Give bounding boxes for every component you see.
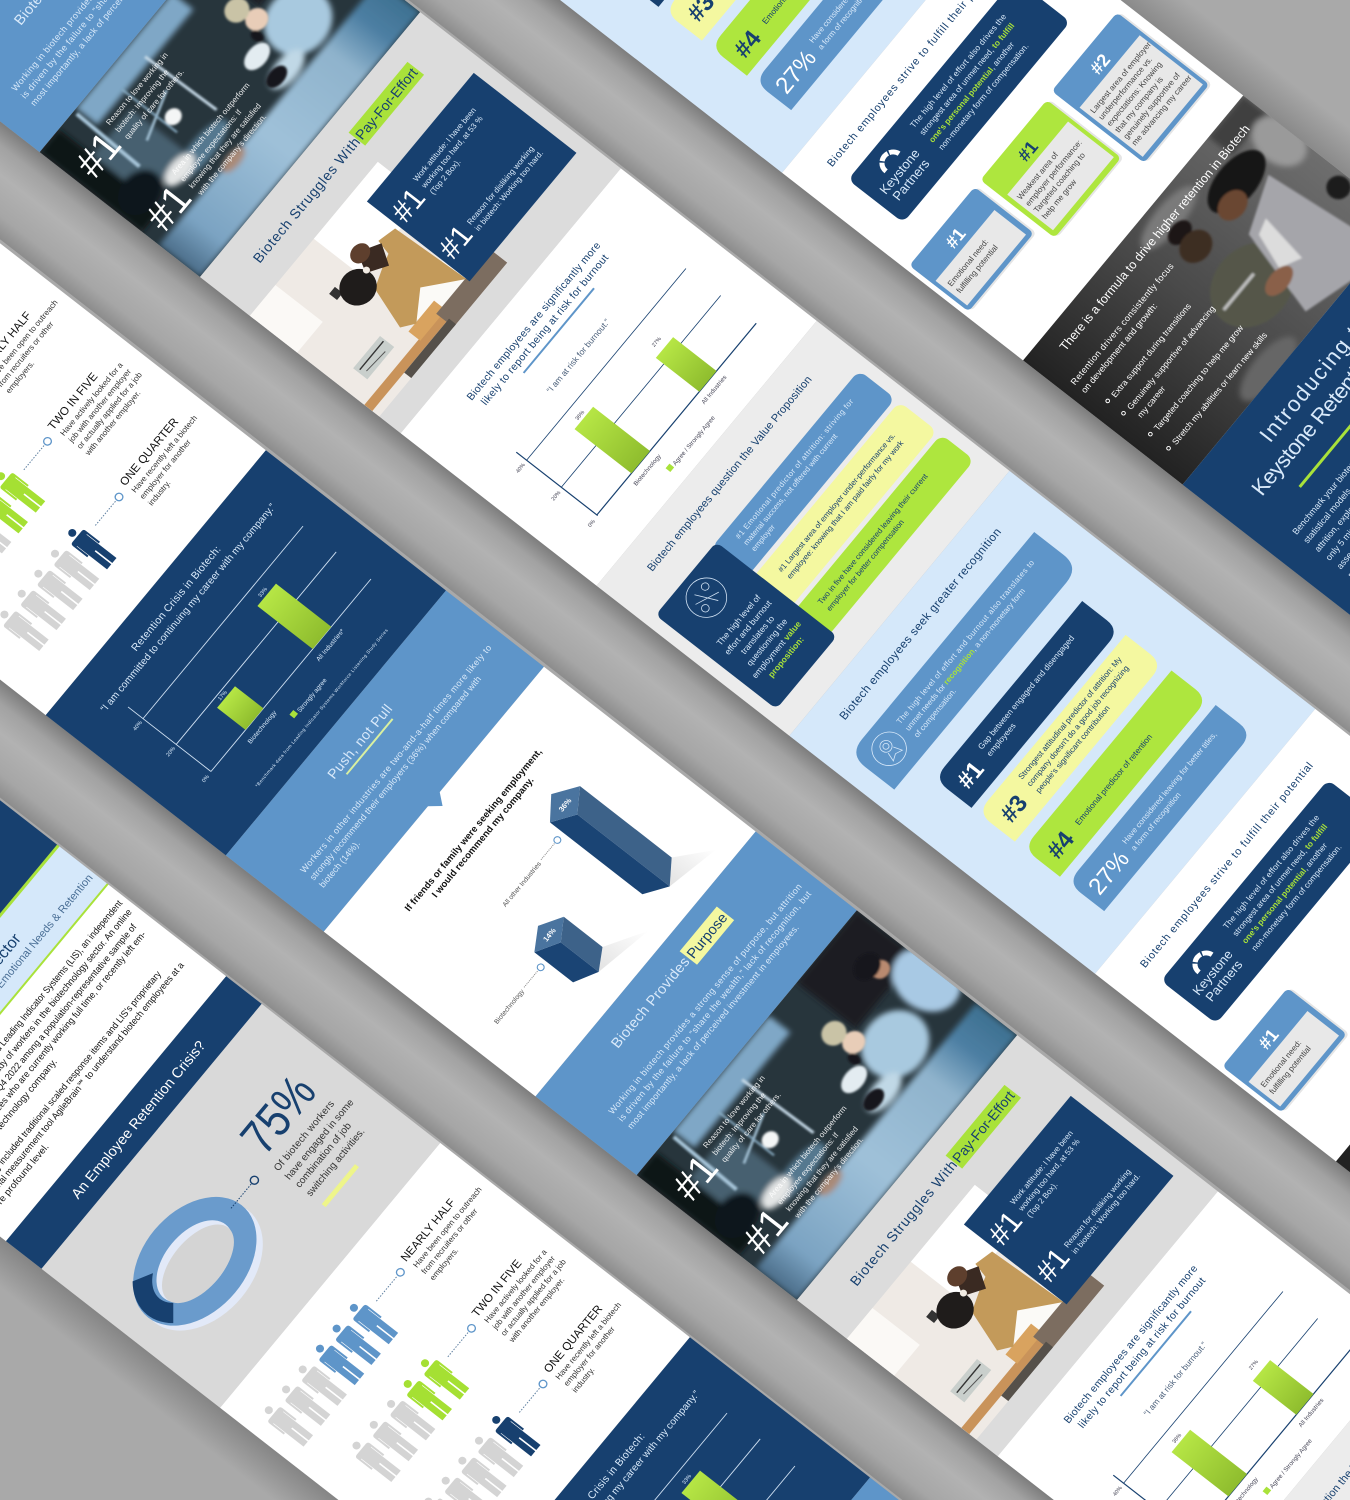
- callout: one quarter: [511, 1292, 640, 1433]
- callout: two in five: Have actively looked for a: [58, 360, 125, 438]
- panel: burnout chart: 20%: [551, 490, 562, 502]
- panel: job switching people: [0, 217, 266, 715]
- panel: study description: [0, 885, 226, 1241]
- card: #2 largest area: expectations: Knowing: [1105, 60, 1164, 128]
- panel: lab photo with stats: [637, 896, 1029, 1300]
- card: #1 emotional need: fulfilling potential: [955, 243, 1000, 295]
- panel: retention crisis chart: Strongly agree: [296, 677, 329, 714]
- panel: burnout chart: likely to report being at risk for burnout: [1076, 1275, 1208, 1431]
- panel: push not pull edge: [650, 1477, 968, 1500]
- pill: #1 gap: Gap between engaged and disengaged: [976, 633, 1077, 751]
- panel: burnout chart: All Industries: [700, 374, 728, 406]
- panel: pay-for-effort: Pay-For-Effort: [352, 65, 421, 143]
- icons: row two: [0, 466, 47, 597]
- callout: one quarter: ONE QUARTER: [542, 1303, 605, 1375]
- callout: one quarter: ONE QUARTER: [118, 416, 181, 488]
- callout: navy stats box: [964, 1096, 1173, 1304]
- callout: two in five: with another employer.: [83, 389, 143, 458]
- pill: 27 percent: [755, 0, 939, 110]
- heading: An Employee Retention Crisis?: An Employee Retention Crisis?: [69, 1038, 209, 1202]
- panel: push not pull: Push, not Pull: [324, 701, 395, 782]
- card: #1 emotional need: Emotional need:: [1259, 1039, 1303, 1089]
- card: keystone statement: strongest area of unmet need, to fulfill: [917, 21, 1016, 137]
- panel: lab photo with stats: Area in which biotech outperform: [170, 81, 252, 177]
- callout: nearly half: NEARLY HALF: [399, 1197, 458, 1264]
- panel: lab photo with stats: knowing that they are satisfied: [187, 102, 263, 190]
- panel: recognition: [789, 471, 1315, 974]
- callout: one quarter: [87, 405, 216, 546]
- panel: push not pull: [226, 590, 544, 932]
- card: keystone statement: non-monetary form of compensation.: [1249, 842, 1344, 953]
- panel: pay-for-effort: [797, 1035, 1218, 1456]
- callout: navy stats box: Work attitude: I have been: [1008, 1129, 1075, 1206]
- card: value proposition: translates to: [738, 614, 776, 656]
- card: #1 weakest area: [980, 98, 1124, 239]
- callout: one quarter: industry.: [570, 1366, 597, 1394]
- bar: all other industries 36%: [537, 750, 716, 912]
- callout: two in five: TWO IN FIVE: [470, 1258, 525, 1319]
- panel: retention crisis chart: All Industries*: [315, 628, 346, 663]
- callout: navy stats box: Reason for disliking working: [1062, 1167, 1133, 1249]
- icons: row two: [347, 1353, 471, 1484]
- panel: lab photo with stats: Reason to love working in: [104, 51, 170, 127]
- callout: nearly half: [368, 1177, 500, 1321]
- card: value proposition: questioning the: [744, 617, 790, 668]
- panel: formula photo: [1023, 89, 1350, 490]
- pill: 27 percent: [1068, 705, 1252, 911]
- panel: push not pull: strongly recommend their employers (36%) when compared with: [308, 674, 483, 882]
- callout: navy stats box: working too hard, at 53 %: [419, 114, 485, 190]
- panel: lab photo with stats: Reason to love working in: [701, 1074, 767, 1150]
- text: stat description: switching activities.: [304, 1127, 368, 1199]
- card: keystone statement: one's personal potential, another: [1240, 841, 1329, 945]
- card: #1 emotional need: [909, 185, 1037, 313]
- panel: burnout chart: Biotech employees are significantly more: [465, 240, 603, 403]
- pill: recognition statement: [849, 532, 1079, 790]
- bar: biotechnology 14%: [523, 877, 648, 998]
- pill: #1 gap: [934, 601, 1119, 808]
- panel: retention crisis chart: 17%: [217, 690, 229, 702]
- list: retention drivers: [1103, 283, 1269, 453]
- label: all other industries: [500, 835, 563, 908]
- card: #2 largest area: Largest area of employer: [1088, 40, 1153, 115]
- panel: lab photo with stats: #1: [137, 177, 200, 239]
- panel: recommendation 3D chart: I would recommend my company.: [430, 775, 537, 900]
- bar: biotechnology 14%: 14%: [541, 926, 558, 943]
- callout: one quarter: employer for another: [562, 1325, 617, 1388]
- pill: #1 gap: #1: [952, 757, 990, 794]
- panel: burnout chart: likely to report being at risk for burnout: [479, 252, 611, 408]
- callout: nearly half: employers.: [428, 1246, 460, 1282]
- icon: percent coins: [678, 570, 735, 625]
- icons: row three: [419, 1410, 542, 1500]
- panel: burnout chart: 40%: [515, 462, 527, 475]
- list: retention drivers: Genuinely supportive of advancing: [1125, 304, 1217, 412]
- panel: burnout chart: 27%: [651, 336, 663, 348]
- panel: formula photo edge: [1336, 896, 1350, 1198]
- panel: burnout chart: Biotechnology: [632, 452, 663, 487]
- card: value proposition: employment value: [750, 619, 803, 680]
- panel: retention crisis chart: *Benchmark data from Leading Indicator Systems Workforce Listening Study Series: [254, 627, 389, 788]
- callout: navy stats box: working too hard, at 53 %: [1016, 1137, 1082, 1213]
- panel: burnout chart: 36%: [1171, 1433, 1183, 1445]
- card: #1 weakest area: help me grow: [1040, 178, 1078, 221]
- panel: value proposition: #1 Emotional predictor of attrition: striving for: [734, 397, 856, 541]
- card: #1 weakest area: employer performance:: [1024, 138, 1084, 208]
- text: stat description: [272, 1089, 378, 1199]
- panel: retention crisis chart: 33%: [257, 587, 269, 599]
- pill: #3 predictor: [978, 635, 1163, 842]
- callout: navy stats box: #1: [432, 219, 480, 265]
- panel: retention crisis chart: “I am committed to continuing my career with my company.”: [99, 502, 278, 714]
- panel: formula photo: There is a formula to drive higher retention in Biotech: [1057, 122, 1253, 353]
- pill: 27 percent: 27%: [1083, 846, 1135, 900]
- pill: #1 gap: [621, 0, 806, 7]
- card: #2 largest area: genuinely supportive of: [1122, 71, 1182, 141]
- panel: biotech provides purpose: [0, 0, 260, 152]
- panel: crisis stat: [42, 1004, 440, 1408]
- panel: burnout chart: 36%: [574, 410, 586, 422]
- connector: [228, 1175, 260, 1211]
- panel: retention crisis chart: Retention Crisis in Biotech:: [129, 544, 224, 654]
- panel: formula photo: on development and growth:: [1079, 301, 1159, 395]
- callout: navy stats box: (Top 2 Box).: [1025, 1180, 1060, 1219]
- panel: biotech provides purpose: Working in biotech provides a strong sense of purpose, but attrition: [606, 882, 804, 1116]
- callout: one quarter: employer for another: [138, 438, 193, 501]
- pill: #1 gap: employees: [984, 721, 1018, 758]
- callout: two in five: or actually applied for a job: [499, 1257, 568, 1338]
- pill: recognition statement: of compensation.: [912, 687, 958, 739]
- callout: navy stats box: (Top 2 Box).: [428, 157, 463, 196]
- callout: navy stats box: #1: [385, 182, 432, 228]
- panel: burnout chart: Agree / Strongly Agree: [1269, 1437, 1314, 1490]
- panel: value proposition: [1194, 1344, 1350, 1500]
- panel: burnout chart: All Industries: [1297, 1397, 1325, 1429]
- pill: #4 retention: Emotional predictor of retention: [1073, 732, 1155, 827]
- text: stat description: have engaged in some: [283, 1097, 357, 1182]
- card: value proposition: The high level of: [714, 592, 763, 647]
- callout: two in five: or actually applied for a job: [75, 370, 144, 451]
- panel: lab photo with stats: employee expectations: If: [775, 1130, 841, 1206]
- label: biotechnology: [492, 963, 547, 1026]
- card: #1 emotional need: #1: [941, 224, 970, 252]
- card: #1 weakest area: Targeted coaching to: [1032, 151, 1087, 214]
- panel: burnout chart: Biotech employees are significantly more: [1062, 1263, 1200, 1426]
- callout: two in five: TWO IN FIVE: [46, 371, 101, 432]
- panel: pay-for-effort: Biotech Struggles With: [249, 134, 363, 266]
- panel: recognition: [519, 0, 1002, 173]
- panel: navy header block: [0, 631, 59, 1111]
- callout: two in five: with another employer.: [507, 1276, 567, 1345]
- callout: one quarter: Have recently left a biotech: [554, 1301, 623, 1381]
- card: value proposition: [655, 542, 837, 709]
- logo: Keystone Partners: Partners: [889, 156, 933, 203]
- heading: An Employee Retention Crisis?: [6, 976, 268, 1274]
- panel: lab photo with stats: [40, 0, 432, 277]
- card: #1 weakest area: Weakest area of: [1015, 150, 1060, 201]
- callout: two in five: job with another employer: [66, 367, 133, 445]
- callout: navy stats box: in biotech: Working too hard.: [1070, 1172, 1142, 1256]
- callout: two in five: Have actively looked for a: [482, 1247, 549, 1325]
- list: retention drivers: my career: [1135, 384, 1168, 420]
- panel: lab photo with stats: #1: [67, 124, 130, 185]
- card: keystone statement: non-monetary form of compensation.: [936, 41, 1031, 152]
- pill: #3 predictor: people's significant contribution: [1034, 704, 1112, 795]
- text: stat description: Of biotech workers: [272, 1099, 337, 1174]
- panel: retention crisis chart: 20%: [165, 746, 177, 758]
- strip: report page, bottom-left run: [0, 508, 1350, 1500]
- card: #1 emotional need: #1: [1254, 1025, 1283, 1053]
- panel: retention crisis chart: 0%: [201, 774, 211, 784]
- panel: push not pull: biotech (14%).: [317, 839, 362, 889]
- callout: nearly half: employers.: [4, 359, 36, 395]
- card: keystone statement: The high level of effort also drives the: [908, 12, 1009, 130]
- panel: burnout chart: 27%: [1248, 1359, 1260, 1371]
- panel: biotech provides purpose: Purpose: [684, 911, 731, 962]
- panel: lab photo with stats: quality of care for others.: [122, 68, 186, 141]
- logo: Keystone Partners: [1178, 939, 1247, 1007]
- callout: navy stats box: Reason for disliking working: [465, 144, 536, 226]
- bar: all other industries 36%: 36%: [557, 796, 574, 813]
- photo: stressed worker: [250, 162, 507, 417]
- panel: lab photo with stats: with the company's direction.: [792, 1135, 865, 1221]
- callout: nearly half: [0, 290, 76, 397]
- pill: #4 retention: #4: [1042, 826, 1080, 864]
- callout: one quarter: industry.: [146, 479, 173, 507]
- panel: retention crisis chart: [46, 450, 446, 855]
- logo: Keystone Partners: Keystone: [876, 146, 923, 197]
- pill: 27 percent: 27%: [770, 45, 822, 99]
- panel: biotech provides purpose: is driven by the failure to “share the wealth,” lack of recognition, but: [616, 889, 814, 1123]
- callout: nearly half: Have been open to outreach: [411, 1185, 484, 1269]
- panel: biotech provides purpose: Biotech Provides: [608, 955, 693, 1051]
- strip: report page, top-right run: [380, 0, 1350, 778]
- stat: 75%: 75%: [231, 1066, 327, 1164]
- panel: value proposition: employer: [749, 522, 777, 553]
- panel: pay-for-effort: [200, 12, 621, 433]
- icons: row three: [0, 523, 118, 653]
- panel: lab photo with stats: quality of care for others.: [719, 1091, 783, 1164]
- callout: navy stats box: Work attitude: I have been: [411, 106, 478, 183]
- panel: biotech provides purpose: most importantly, a lack of perceived investment in employees.: [625, 923, 801, 1131]
- donut chart: 75 percent: [108, 1174, 288, 1354]
- callout: navy stats box: #1: [982, 1205, 1029, 1251]
- panel: lab photo with stats: biotech: Improving the: [113, 67, 171, 134]
- logo: Keystone Partners: [865, 138, 934, 206]
- panel: lab photo with stats: Area in which biotech outperform: [767, 1104, 849, 1200]
- pill: 27 percent: a form of recognition: [1129, 791, 1183, 852]
- logo: Keystone Partners: Keystone: [1189, 947, 1236, 998]
- panel: lab photo with stats: #1: [664, 1147, 727, 1208]
- card: keystone statement: one's personal potential, another: [927, 40, 1016, 144]
- panel: lab photo with stats: biotech: Improving the: [710, 1090, 768, 1157]
- panel: formula photo: Retention drivers consistently focus: [1069, 261, 1176, 387]
- pill: #4 retention: [711, 0, 895, 76]
- pill: 27 percent: Have considered leaving for better titles,: [1120, 730, 1219, 846]
- panel: lab photo with stats: employee expectations: If: [178, 107, 244, 183]
- card: #2 largest area: [1052, 11, 1212, 164]
- panel: burnout chart: Agree / Strongly Agree: [672, 414, 717, 467]
- panel: burnout chart: [998, 1191, 1350, 1500]
- photo: stressed worker: [847, 1185, 1104, 1440]
- panel: recognition: Biotech employees seek greater recognition: [837, 526, 1004, 723]
- panel: lab photo with stats: with the company's direction.: [195, 112, 268, 198]
- icons: row one: [259, 1298, 400, 1449]
- text: stat description: combination of job: [293, 1121, 354, 1190]
- callout: nearly half: from recruiters or other: [420, 1207, 480, 1276]
- callout: navy stats box: #1: [1029, 1242, 1077, 1288]
- card: #2 largest area: that my company is: [1113, 75, 1165, 134]
- accent underline: [322, 1164, 359, 1207]
- pill: #3 predictor: company doesn't do a good job recognizing: [1025, 664, 1131, 788]
- card: keystone statement: [848, 0, 1070, 223]
- card: #1 emotional need: fulfilling potential: [1268, 1044, 1313, 1096]
- panel: value proposition: [597, 321, 1010, 736]
- panel: value proposition: employee: knowing that I am paid fairly for my work: [785, 439, 905, 581]
- panel: burnout chart: “I am at risk for burnout.”: [1142, 1340, 1209, 1418]
- callout: two in five: [15, 349, 153, 496]
- pill: #4 retention: #4: [729, 25, 767, 63]
- panel: lab photo with stats: knowing that they are satisfied: [784, 1125, 860, 1213]
- panel: value proposition: Biotech employees question the Value Proposition: [645, 374, 815, 574]
- pill: #4 retention: [1024, 671, 1208, 877]
- panel: value proposition: employer for better compensation: [825, 518, 906, 613]
- callout: two in five: job with another employer: [490, 1254, 557, 1332]
- panel: push not pull: Workers in other industries are two-and-a-half times more likely to: [298, 643, 494, 875]
- panel: fulfil potential: [1095, 709, 1350, 1161]
- card: keystone statement: [1161, 780, 1350, 1024]
- card: #2 largest area: underperformance vs.: [1097, 55, 1154, 121]
- panel: fulfil potential: [782, 0, 1243, 360]
- panel: burnout chart: 40%: [1112, 1485, 1124, 1498]
- card: #2 largest area: me advancing my career: [1130, 73, 1194, 147]
- panel: burnout chart: [401, 168, 817, 586]
- pill: #3 predictor: #3: [995, 790, 1033, 827]
- panel: retention crisis chart: Biotechnology: [247, 709, 279, 745]
- card: #1 emotional need: Emotional need:: [946, 238, 990, 288]
- callout: one quarter: Have recently left a biotech: [130, 414, 199, 494]
- panel: job switching people: [220, 1143, 690, 1500]
- callout: two in five: [439, 1236, 577, 1383]
- card: #2 largest area: #2: [1086, 50, 1114, 78]
- panel: fulfil potential: Biotech employees strive to fulfill their potential: [1138, 760, 1316, 970]
- list: retention drivers: Stretch my abilities or learn new skills: [1170, 330, 1269, 447]
- card: keystone statement: The high level of effort also drives the: [1221, 813, 1322, 931]
- label: all other industries: All other Industries: [501, 860, 543, 908]
- logo: Keystone Partners: Partners: [1202, 957, 1246, 1004]
- panel: introducing formula: [1183, 220, 1350, 644]
- callout: navy stats box: [367, 73, 576, 281]
- panel: retention crisis chart: 40%: [132, 720, 144, 732]
- card: #1 emotional need: [1222, 986, 1350, 1114]
- panel: recommendation 3D chart: If friends or family were seeking employment,: [403, 747, 545, 914]
- panel: pay-for-effort: Biotech Struggles With: [846, 1157, 960, 1289]
- panel: burnout chart: 0%: [587, 519, 597, 529]
- panel: value proposition: Two in five have considered leaving their current: [816, 472, 930, 606]
- pill: recognition statement: unmet needs for recognition, a non-monetary form: [903, 586, 1027, 732]
- card: #1 weakest area: #1: [1014, 137, 1042, 165]
- panel: lab photo with stats: #1: [734, 1200, 797, 1262]
- panel: report subtitle band: [0, 845, 109, 1150]
- panel: recommendation 3D chart: [323, 666, 756, 1096]
- panel: pay-for-effort: Pay-For-Effort: [949, 1088, 1018, 1166]
- pill: #3 predictor: Strongest attitudinal predictor of attrition: My: [1016, 655, 1124, 781]
- pill: recognition statement: The high level of effort and burnout also translates to: [895, 558, 1037, 726]
- panel: retention crisis chart: [470, 1337, 870, 1500]
- panel: value proposition: #1 Largest area of employer under-performance vs.: [776, 431, 897, 574]
- card: value proposition: effort and burnout: [722, 598, 774, 657]
- list: retention drivers: Targeted coaching to help me grow: [1152, 323, 1246, 432]
- list: retention drivers: Extra support during transitions: [1109, 301, 1193, 399]
- callout: navy stats box: in biotech: Working too hard.: [473, 149, 545, 233]
- pill: #3 predictor: [665, 0, 850, 41]
- panel: value proposition: material success, not offered with current: [742, 431, 840, 547]
- card: keystone statement: strongest area of unmet need, to fulfill: [1230, 822, 1329, 938]
- panel: retention crisis chart: 33%: [681, 1474, 693, 1486]
- label: biotechnology: Biotechnology: [493, 988, 526, 1026]
- panel: burnout chart: “I am at risk for burnout.”: [545, 317, 612, 395]
- card: value proposition: proposition:: [766, 635, 806, 679]
- panel: biotech provides purpose: [536, 832, 857, 1175]
